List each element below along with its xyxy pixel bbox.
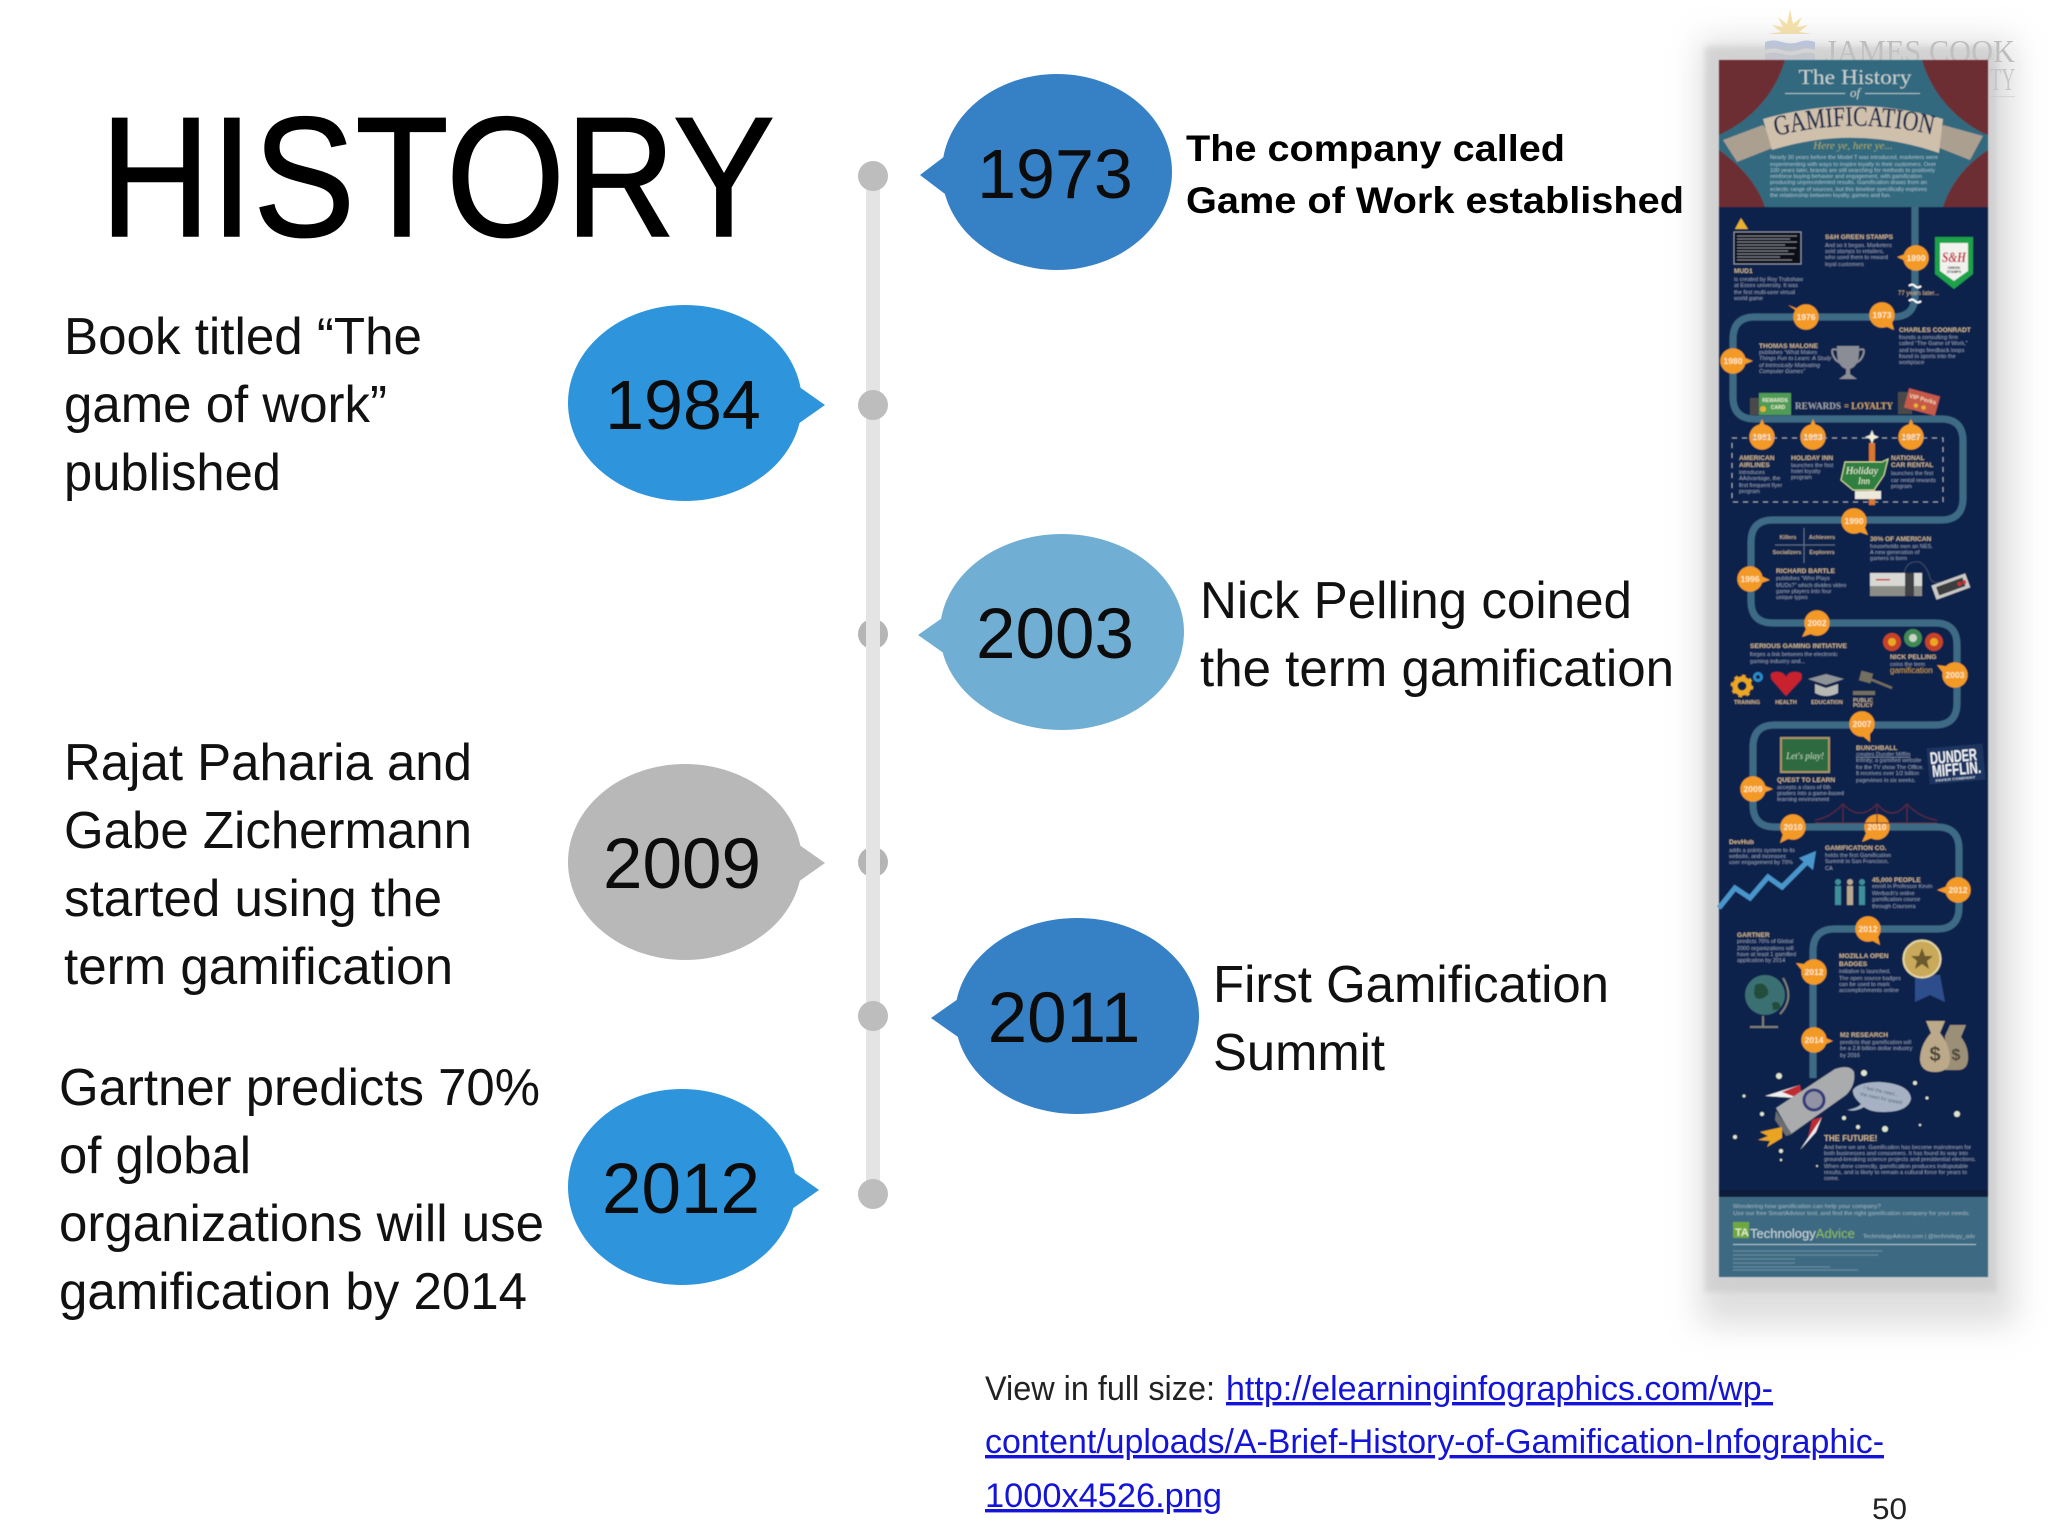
chart: Bartle player types	[1773, 528, 1835, 563]
entry: Gartner: predicts 70% of Global	[1737, 939, 1793, 945]
logo: Dunder Mifflin: MIFFLIN.	[1931, 758, 1982, 781]
icon: globe	[1745, 975, 1788, 1027]
entry: 30% of American households: A new generation of	[1870, 550, 1920, 556]
entry: Mozilla Open Badges	[1839, 953, 1901, 994]
entry: S&H Green Stamps: And so it began. Marketers	[1825, 243, 1892, 249]
entry: Richard Bartle: unique types	[1776, 595, 1808, 601]
year markers: 2010	[1784, 822, 1803, 832]
infographic header: GAMIFICATION	[1774, 106, 1936, 136]
infographic header	[1718, 59, 1989, 208]
entry: Mozilla Open Badges: can be used to mark	[1839, 982, 1890, 988]
speech bubble: the need for speed!	[1860, 1092, 1903, 1106]
icon: rocket	[1758, 1067, 1854, 1150]
infographic header: the relationship between loyalty, games and fun.	[1770, 193, 1891, 199]
entry: American Airlines: AIRLINES	[1739, 462, 1770, 469]
rewards equals loyalty row: REWARDS	[1762, 398, 1788, 404]
entry: Gartner	[1737, 932, 1796, 964]
icon: rising arrow	[1719, 851, 1816, 908]
logo: Dunder Mifflin	[1927, 744, 1986, 784]
entry: MUD1: MUD1	[1734, 268, 1753, 275]
rewards equals loyalty row: CARD	[1771, 405, 1786, 411]
entry: Bunchball: It receives over 1/2 billion	[1856, 771, 1919, 777]
logo: Dunder Mifflin: DUNDER	[1929, 745, 1978, 768]
entry: M2 Research: predicts that gamification will	[1840, 1040, 1911, 1046]
entry: Quest to Learn: accepts a class of 6th	[1777, 785, 1831, 791]
entry: MUD1: at Essex university. It was	[1734, 283, 1798, 289]
source link text: View in full size:	[985, 1370, 1215, 1408]
entry: Bunchball: Infinity, a gamified website	[1856, 758, 1921, 764]
icon: education cap: EDUCATION	[1811, 700, 1843, 706]
entry: Charles Coonradt: called “The Game of Work,”	[1899, 341, 1968, 347]
text: 1973 event	[1186, 127, 1684, 221]
entry: American Airlines	[1739, 455, 1782, 495]
entry: 30% of American households	[1870, 536, 1933, 562]
text: 2003 event: the term gamification	[1200, 640, 1674, 698]
year markers: 1987	[1902, 432, 1921, 442]
entry: Richard Bartle: publishes “Who Plays	[1776, 576, 1830, 582]
entry: DevHub: website, and increases	[1728, 854, 1786, 860]
infographic header: 100 years later, brands are still searching for methods to positively	[1770, 168, 1935, 174]
entry: M2 Research: by 2016	[1840, 1053, 1860, 1059]
text: 2011 event: First Gamification	[1213, 956, 1609, 1014]
icon: Holiday Inn sign: Inn	[1857, 476, 1870, 486]
logo: James Cook University watermark: JAMES COOK	[1825, 33, 2015, 69]
icon: chalkboard: Let's play!	[1785, 751, 1824, 761]
entry: Nick Pelling: coins the term	[1890, 662, 1925, 668]
text: 2012 event: organizations will use	[59, 1195, 544, 1253]
text: 2009 event: term gamification	[64, 938, 453, 996]
year markers: 2007	[1853, 719, 1872, 729]
icon: S&H shield: S&H	[1942, 250, 1967, 266]
infographic header: of	[1850, 85, 1862, 100]
winding timeline path	[1733, 207, 1963, 1078]
logo: Dunder Mifflin: PAPER COMPANY	[1935, 775, 1976, 783]
entry: Quest to Learn: QUEST TO LEARN	[1777, 777, 1835, 784]
text: 2012 event	[59, 1059, 544, 1321]
text: 2009 event	[64, 734, 472, 996]
infographic header: producing unprecedented results. Gamification draws from an	[1770, 180, 1927, 186]
year markers: 2012	[1805, 967, 1824, 977]
icon: trophy	[1832, 346, 1864, 379]
entry: Gamification Co.: Summit in San Francisco,	[1825, 859, 1889, 865]
bubble: 2011: 2011	[988, 979, 1140, 1058]
entry: Serious Gaming Initiative: forges a link between the electronic	[1750, 652, 1838, 658]
entry: Nick Pelling: NICK PELLING	[1890, 654, 1937, 661]
infographic background	[1719, 60, 1988, 1277]
infographic drop shadow	[1700, 40, 2015, 1325]
icon: public policy gavel	[1853, 671, 1892, 709]
entry: Charles Coonradt: CHARLES COONRADT	[1899, 327, 1971, 334]
year markers: 2014	[1805, 1035, 1824, 1045]
entry: Bunchball: BUNCHBALL	[1856, 745, 1897, 752]
entry: M2 Research: be a 2.8 billion dollar industry	[1840, 1046, 1913, 1052]
text: 1973 event: Game of Work established	[1186, 179, 1684, 221]
entry: Gartner: application by 2014	[1737, 958, 1785, 964]
entry: 30% of American households: households own an NES.	[1870, 544, 1933, 550]
rewards equals loyalty row: REWARDS	[1795, 402, 1841, 412]
timeline spine with dots	[858, 161, 888, 1209]
infographic header: reinforce buying behavior and engagement, with gamification	[1770, 174, 1922, 180]
infographic footer: TA	[1735, 1227, 1749, 1239]
entry: Bunchball: for the TV show The Office.	[1856, 765, 1924, 771]
entry: Mozilla Open Badges: BADGES	[1839, 961, 1868, 968]
note: 77 years later	[1898, 284, 1939, 302]
rewards equals loyalty row: VIP Perks	[1908, 394, 1937, 407]
entry: Gamification Co.	[1825, 845, 1891, 872]
icon: training gears: TRAINING	[1734, 700, 1760, 706]
year markers: 1973	[1873, 310, 1892, 320]
icon: Holiday Inn sign	[1841, 430, 1888, 505]
bubble: 1973: 1973	[977, 135, 1133, 213]
entry: Serious Gaming Initiative: SERIOUS GAMING INITIATIVE	[1750, 643, 1848, 650]
bubble: 1973	[920, 74, 1172, 270]
entry: Serious Gaming Initiative	[1750, 643, 1848, 665]
text: 2003 event	[1200, 572, 1674, 698]
entry: Gamification Co.: GAMIFICATION CO.	[1825, 845, 1887, 852]
icon: Golden Gate bridge	[1815, 804, 1937, 823]
year markers: 1983	[1804, 432, 1823, 442]
bubble: 2003: 2003	[976, 595, 1134, 674]
entry: American Airlines: AAdvantage, the	[1739, 476, 1780, 482]
entry: Holiday Inn: HOLIDAY INN	[1791, 455, 1833, 462]
text: 2009 event: Gabe Zichermann	[64, 802, 472, 860]
year markers: 1996	[1741, 574, 1760, 584]
icon: money bags: $	[1952, 1047, 1961, 1064]
entry: The Future: results, and is likely to remain a cultural force for years to	[1824, 1170, 1967, 1176]
entry: MUD1: the first multi-user virtual	[1734, 290, 1795, 296]
bubble: 1984	[568, 305, 825, 501]
source link text: 1000x4526.png	[985, 1477, 1222, 1515]
entry: National Car Rental: launches the first	[1891, 471, 1934, 477]
infographic header: experimenting with ways to inspire loyalty in their customers. Over	[1770, 162, 1936, 168]
entry: The Future: When done correctly, gamification produces indisputable	[1824, 1164, 1968, 1170]
year markers: 2010	[1868, 822, 1887, 832]
entry: 45,000 people: gamification course	[1872, 897, 1920, 903]
icon: game badges	[1883, 629, 1943, 651]
entry: The Future: both businesses and consumers. It has found its way into	[1824, 1151, 1968, 1157]
bubble: 2003	[918, 534, 1184, 730]
entry: DevHub: adds a points system to its	[1729, 848, 1795, 854]
bubble: 1984: 1984	[605, 366, 761, 444]
page number: 50	[1872, 1493, 1907, 1526]
entry: Mozilla Open Badges: accomplishments online	[1839, 988, 1899, 994]
entry: Gamification Co.: CA	[1825, 866, 1833, 872]
year markers: 2002	[1808, 618, 1827, 628]
entry: 45,000 people: through Coursera	[1872, 904, 1916, 910]
entry: Richard Bartle: game players into four	[1776, 589, 1831, 595]
infographic footer	[1719, 1190, 1988, 1277]
entry: MUD1	[1733, 218, 1804, 302]
entry: S&H Green Stamps: who used them to reward	[1824, 255, 1888, 261]
logo: James Cook University watermark	[1765, 9, 2015, 97]
entry: Thomas Malone: of Intrinsically Motivating	[1759, 363, 1821, 369]
text: 2009 event: started using the	[64, 870, 442, 928]
chart: Bartle player types: Achievers	[1809, 535, 1835, 541]
entry: American Airlines: introduces	[1739, 470, 1765, 476]
entry: National Car Rental: car rental rewards	[1891, 478, 1936, 484]
entry: Mozilla Open Badges: The open source badges	[1839, 976, 1901, 982]
entry: The Future: come.	[1824, 1176, 1840, 1182]
infographic footer: Wondering how gamification can help your company?	[1733, 1204, 1882, 1210]
entry: DevHub: user engagement by 70%	[1729, 860, 1793, 866]
entry: Thomas Malone: publishes “What Makes	[1759, 350, 1817, 356]
bubble: 2009	[568, 764, 825, 960]
entry: Quest to Learn: graders into a game-based	[1777, 791, 1844, 797]
year markers: 2012	[1859, 924, 1878, 934]
entry: Nick Pelling: gamification	[1890, 666, 1933, 675]
entry: American Airlines: first frequent flyer	[1739, 483, 1782, 489]
entry: Mozilla Open Badges: MOZILLA OPEN	[1839, 953, 1889, 960]
text: 2011 event: Summit	[1213, 1024, 1386, 1082]
icon: Holiday Inn sign: Holiday	[1845, 466, 1879, 477]
year markers: 1990	[1845, 516, 1864, 526]
entry: Charles Coonradt: workplace	[1898, 360, 1924, 366]
text: 2009 event: Rajat Paharia and	[64, 734, 472, 792]
entry: 45,000 people	[1872, 877, 1933, 910]
entry: DevHub	[1728, 839, 1795, 866]
speech bubble	[1847, 1082, 1911, 1112]
year markers: 1980	[1724, 356, 1743, 366]
entry: Nick Pelling	[1890, 654, 1937, 675]
icon: S&H shield	[1935, 237, 1973, 289]
entry: Gamification Co.: holds the first Gamification	[1825, 853, 1891, 859]
icon: chalkboard	[1781, 738, 1829, 772]
entry: S&H Green Stamps	[1824, 234, 1894, 268]
source link text: http://elearninginfographics.com/wp-	[1226, 1370, 1773, 1408]
title: HISTORY	[100, 82, 775, 273]
year markers: 2003	[1946, 670, 1965, 680]
icon: S&H shield: GREEN	[1948, 266, 1961, 270]
entry: The Future: ground-breaking science projects and presidential elections.	[1824, 1157, 1976, 1163]
entry: MUD1: world game	[1733, 296, 1763, 302]
entry: Charles Coonradt: found in sports into the	[1899, 354, 1956, 360]
entry: Thomas Malone: THOMAS MALONE	[1759, 343, 1819, 350]
entry: M2 Research	[1840, 1032, 1913, 1059]
entry: DevHub: DevHub	[1729, 839, 1754, 846]
entry: 45,000 people: Werbach's online	[1872, 891, 1915, 897]
icon: money bags: $	[1929, 1044, 1941, 1066]
entry: S&H Green Stamps: sold stamps to retailers,	[1825, 249, 1885, 255]
entry: National Car Rental: NATIONAL	[1891, 455, 1925, 462]
entry: Richard Bartle	[1776, 568, 1846, 601]
text: 1984 event: Book titled “The	[64, 308, 422, 366]
entry: Bunchball: pageviews in six weeks.	[1856, 778, 1916, 784]
infographic footer: TechnologyAdvice	[1750, 1226, 1855, 1241]
icon: money bags	[1920, 1021, 1968, 1072]
entry: Richard Bartle: MUDs?” which divides video	[1776, 583, 1846, 589]
entry: Holiday Inn: program	[1791, 475, 1812, 481]
text: 2011 event	[1213, 956, 1609, 1082]
icon: public policy gavel: PUBLIC	[1853, 698, 1873, 704]
entry: Quest to Learn: learning environment	[1777, 797, 1830, 803]
source link text	[985, 1370, 1884, 1515]
entry: National Car Rental: program	[1891, 484, 1912, 490]
rewards equals loyalty row	[1750, 388, 1940, 416]
infographic thumbnail: History of Gamification	[1716, 59, 1989, 1278]
entry: 45,000 people: enroll in Professor Kevin	[1872, 884, 1933, 890]
entry: American Airlines: program	[1739, 489, 1760, 495]
stars	[1733, 1070, 1960, 1167]
icon: NES console and controller	[1870, 562, 1970, 600]
icon: medal	[1904, 940, 1945, 1002]
icon: S&H shield: STAMPS	[1947, 270, 1962, 274]
entry: Holiday Inn: hotel loyalty	[1791, 469, 1821, 475]
entry: MUD1: is created by Roy Trubshaw	[1734, 277, 1804, 283]
infographic footer: TechnologyAdvice.com | @technology_adv	[1863, 1234, 1975, 1240]
entry: Holiday Inn: launches the first	[1791, 463, 1834, 469]
text: 1973 event: The company called	[1186, 127, 1565, 169]
bubble: 2011	[931, 918, 1199, 1114]
speech bubble: I feel the need...	[1863, 1085, 1899, 1098]
icon: health heart	[1771, 672, 1802, 706]
year markers: 1976	[1797, 312, 1816, 322]
entry: Thomas Malone: Things Fun to Learn: A Study	[1759, 356, 1833, 362]
text: 2003 event: Nick Pelling coined	[1200, 572, 1632, 630]
rewards equals loyalty row: = LOYALTY	[1844, 402, 1893, 412]
icon: training gears	[1732, 674, 1762, 706]
chart: Bartle player types: Socializers	[1773, 550, 1801, 556]
entry: M2 Research: M2 RESEARCH	[1840, 1032, 1888, 1039]
entry: Bunchball	[1856, 745, 1924, 784]
entry: National Car Rental: CAR RENTAL	[1891, 462, 1933, 469]
bubble: 2012	[568, 1089, 819, 1285]
chart: Bartle player types: Killers	[1780, 535, 1796, 541]
icon: public policy gavel: POLICY	[1853, 703, 1873, 709]
text: 2012 event: Gartner predicts 70%	[59, 1059, 540, 1117]
entry: Gartner: 2000 organizations will	[1737, 946, 1794, 952]
note: 77 years later: 77 years later...	[1898, 291, 1939, 297]
infographic header: Here ye, here ye...	[1812, 140, 1893, 152]
entry: 30% of American households: 30% OF AMERICAN	[1870, 536, 1932, 543]
bubble: 2012: 2012	[602, 1150, 760, 1229]
entry: Thomas Malone	[1759, 343, 1833, 375]
entry: Bunchball: creates Dunder Mifflin	[1856, 752, 1910, 758]
entry: American Airlines: AMERICAN	[1739, 455, 1775, 462]
entry: Holiday Inn	[1791, 455, 1834, 481]
infographic header: Nearly 30 years before the Model T was introduced, marketers were	[1770, 155, 1938, 161]
logo: James Cook University watermark: TY	[1990, 61, 2015, 97]
bubble: 2009: 2009	[603, 825, 761, 904]
entry: The Future: And here we are. Gamification has become mainstream for	[1824, 1145, 1971, 1151]
entry: 30% of American households: gamers is born	[1870, 556, 1907, 562]
text: 2012 event: gamification by 2014	[59, 1263, 527, 1321]
infographic footer: Use our free SmartAdvisor tool, and find the right gamification company for your needs.	[1733, 1211, 1970, 1217]
text: 2012 event: of global	[59, 1127, 251, 1185]
entry: Mozilla Open Badges: initiative is launched.	[1839, 969, 1891, 975]
entry: 45,000 people: 45,000 PEOPLE	[1872, 877, 1921, 884]
entry: Thomas Malone: Computer Games”	[1759, 369, 1806, 375]
entry: Gartner: have at least 1 gamified	[1737, 952, 1796, 958]
entry: Richard Bartle: RICHARD BARTLE	[1776, 568, 1836, 575]
text: 1984 event	[64, 308, 422, 502]
year markers: 1890	[1907, 253, 1926, 263]
entry: Charles Coonradt	[1898, 327, 1971, 366]
infographic header: The History	[1798, 65, 1912, 89]
entry: Charles Coonradt: founds a consulting firm	[1899, 335, 1958, 341]
text: 1984 event: game of work”	[64, 376, 387, 434]
icon: health heart: HEALTH	[1775, 700, 1797, 706]
icon: education cap	[1808, 674, 1844, 706]
year markers: 2012	[1949, 885, 1968, 895]
entry: S&H Green Stamps: S&H GREEN STAMPS	[1825, 234, 1894, 241]
chart: Bartle player types: Explorers	[1809, 550, 1835, 556]
entry: National Car Rental	[1891, 455, 1936, 490]
entry: The Future	[1824, 1134, 1976, 1182]
year markers	[1720, 245, 1971, 1053]
text: 1984 event: published	[64, 444, 281, 502]
entry: Quest to Learn	[1777, 777, 1844, 803]
entry: S&H Green Stamps: loyal customers	[1825, 262, 1864, 268]
entry: Serious Gaming Initiative: gaming industry and...	[1750, 659, 1805, 665]
year markers: 2009	[1744, 784, 1763, 794]
infographic header: eclectic range of sources, but this timeline specifically explores	[1770, 187, 1927, 193]
entry: Charles Coonradt: and brings feedback loops	[1899, 348, 1965, 354]
entry: Gartner: GARTNER	[1737, 932, 1770, 939]
dashed loyalty programs box	[1732, 438, 1943, 502]
source link text: content/uploads/A-Brief-History-of-Gamification-Infographic-	[985, 1423, 1884, 1461]
entry: The Future: THE FUTURE!	[1824, 1134, 1877, 1143]
year markers: 1981	[1753, 432, 1772, 442]
icon: people	[1835, 879, 1865, 905]
